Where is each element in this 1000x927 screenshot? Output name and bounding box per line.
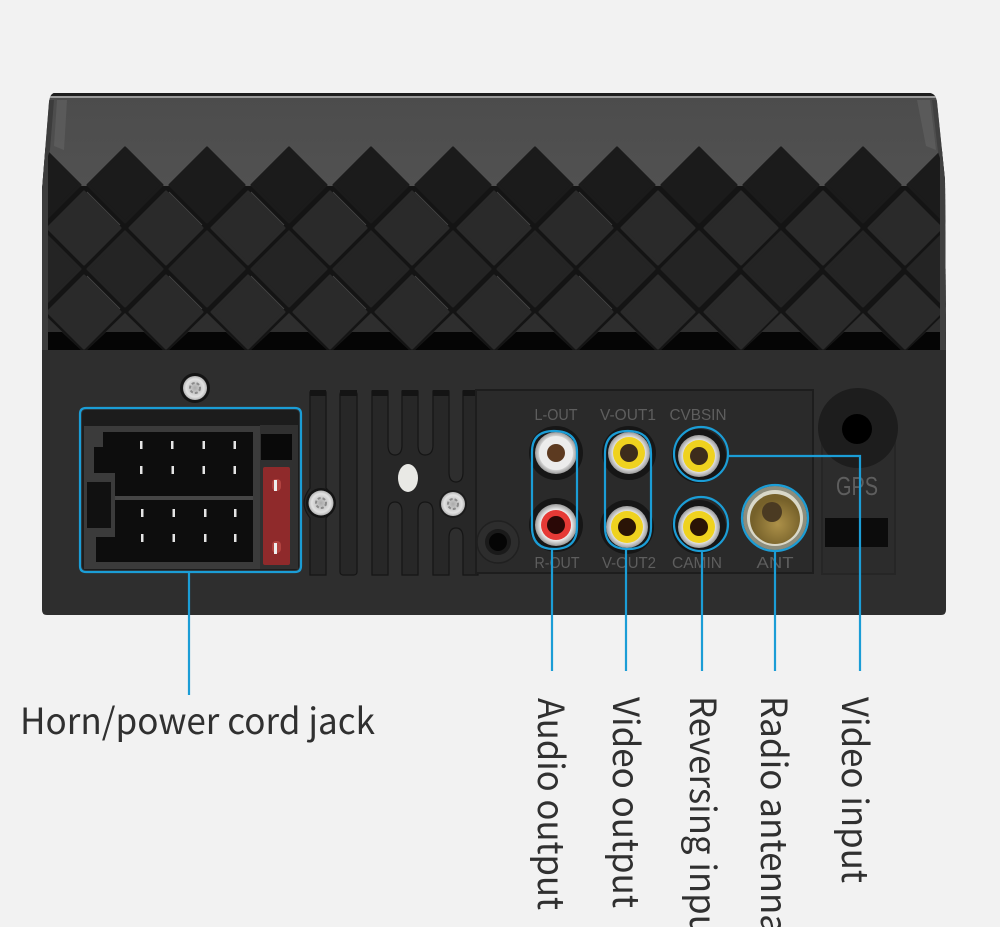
RCA jack: camera in <box>672 500 726 554</box>
label: video output: Video output <box>602 697 654 908</box>
engraved port labels: ANT <box>756 555 794 572</box>
RCA jack: video out 1 <box>602 426 656 480</box>
GPS engraved label: GPS <box>836 471 878 501</box>
callout: horn/power connector <box>80 408 301 695</box>
recessed AV panel <box>476 390 813 573</box>
engraved port labels: V-OUT1 <box>600 407 656 424</box>
engraved port labels: V-OUT2 <box>602 555 656 572</box>
mounting slot <box>398 464 418 492</box>
RCA jack: audio left <box>529 426 583 480</box>
callout: radio antenna <box>742 485 808 671</box>
connector pins <box>140 441 236 542</box>
engraved port labels: CVBSIN <box>670 407 726 424</box>
vent slot top shadows <box>310 390 477 396</box>
radio antenna socket <box>743 486 807 550</box>
callout: reversing input <box>674 497 728 671</box>
fuse <box>263 467 290 565</box>
engraved port labels: R-OUT <box>534 555 580 572</box>
RCA jack: video in <box>672 429 726 483</box>
label: video input: Video input <box>831 697 883 883</box>
vent slots <box>304 391 478 575</box>
callout: video input <box>674 427 860 671</box>
engraved port labels: CAMIN <box>672 555 722 572</box>
gloss highlights <box>54 100 67 150</box>
top housing with diamond vents <box>5 92 983 354</box>
label: horn/power cord jack: Horn/power cord jack <box>20 693 375 745</box>
GPS antenna socket <box>818 388 898 468</box>
callout: audio output <box>532 431 577 671</box>
headphone jack <box>477 521 519 563</box>
label: audio output: Audio output <box>527 698 579 910</box>
GPS sub panel <box>822 440 895 574</box>
black cut-out <box>825 518 888 547</box>
screws <box>180 373 676 518</box>
housing side edges <box>42 100 54 350</box>
rear connector plate <box>42 350 946 615</box>
ISO power connector <box>82 410 299 570</box>
radio unit body <box>5 92 983 615</box>
RCA jack: video out 2 <box>600 500 654 554</box>
callout lines <box>80 408 860 695</box>
engraved port labels: L-OUT <box>534 407 578 424</box>
RCA jack: audio right <box>529 498 583 552</box>
engraved port labels <box>534 407 794 572</box>
callout: video output <box>605 431 651 671</box>
